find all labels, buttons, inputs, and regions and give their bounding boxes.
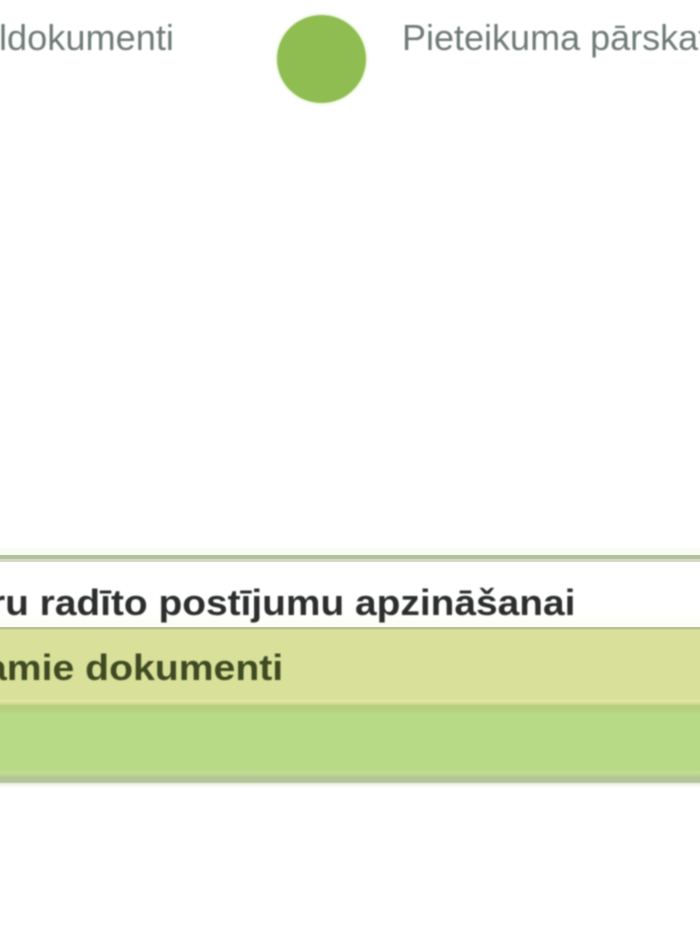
legend label: application review: Pieteikuma pārskat bbox=[402, 17, 700, 58]
row text: damage awareness: ru radīto postījumu apzināšanai bbox=[0, 582, 575, 623]
icon: green circle bbox=[277, 15, 366, 103]
table band: olive row bbox=[0, 627, 700, 705]
table band: green row bbox=[0, 705, 700, 787]
table band: white row bbox=[0, 548, 700, 627]
legend label: documents: ldokumenti bbox=[0, 17, 174, 58]
